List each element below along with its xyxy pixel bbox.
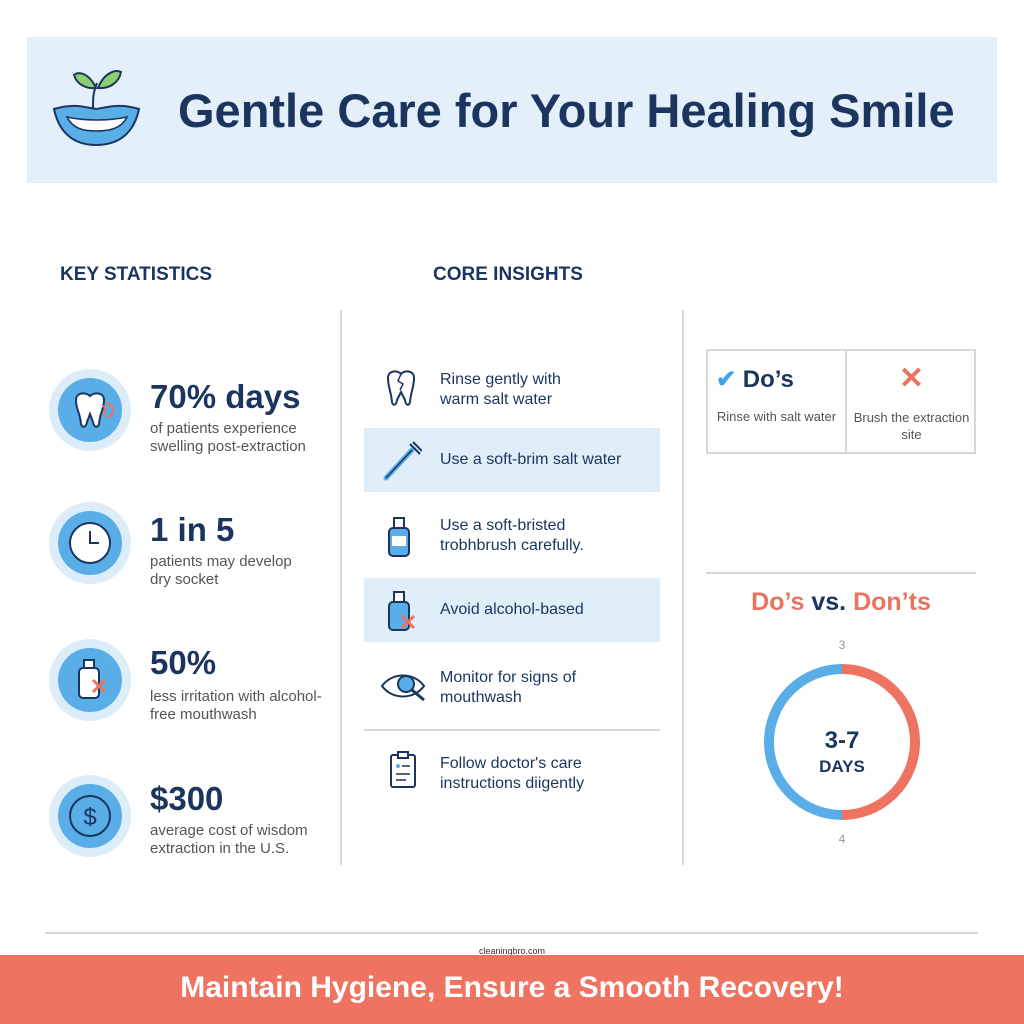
- stat: 1 in 5: 1 in 5: [150, 511, 234, 548]
- stat: $300: extraction in the U.S.: [150, 840, 289, 857]
- stat: 1 in 5: [49, 502, 292, 588]
- stat: $300: average cost of wisdom: [150, 822, 308, 839]
- insight 1: Rinse gently with: [440, 371, 561, 388]
- stat: 50%: [49, 639, 322, 723]
- insight 3: Use a soft-bristed: [440, 517, 565, 534]
- insight 6: Follow doctor's care: [440, 755, 582, 772]
- insight 2 highlighted: Use a soft-brim salt water: [440, 451, 621, 468]
- heading: key statistics: KEY STATISTICS: [60, 264, 212, 285]
- stat: $300: $: [83, 804, 97, 831]
- stat: 70%: of patients experience: [150, 420, 297, 437]
- do's cell: ✔ Do’s: [716, 366, 794, 393]
- footer banner: [0, 955, 1024, 1024]
- stat: 50%: less irritation with alcohol-: [150, 688, 322, 705]
- chart: recovery donut: 3-7: [825, 727, 859, 754]
- chart: recovery donut: [764, 638, 920, 846]
- stat: $300: $300: [150, 780, 223, 817]
- insight 1: warm salt water: [440, 391, 552, 408]
- stat: 50%: free mouthwash: [150, 706, 257, 723]
- don'ts cell: ✕: [899, 362, 924, 395]
- stat: 70%: [49, 369, 306, 455]
- insight 6: instructions diigently: [440, 775, 584, 792]
- insight 5: Monitor for signs of: [440, 669, 576, 686]
- insight 3: [388, 517, 584, 557]
- heading: do's vs don'ts: Do’s vs. Don’ts: [751, 588, 931, 616]
- don'ts cell: Brush the extraction: [854, 410, 969, 425]
- insight 1: [387, 370, 561, 408]
- insight 5: mouthwash: [440, 689, 522, 706]
- insight 5: [380, 669, 576, 706]
- don'ts cell: [854, 362, 969, 442]
- don'ts cell: site: [901, 427, 922, 442]
- insight 4 highlighted: [364, 578, 660, 642]
- insight 6: [390, 751, 584, 792]
- footer banner: Maintain Hygiene, Ensure a Smooth Recovery!: [180, 971, 844, 1004]
- source text: cleaningbro.com: [479, 946, 545, 956]
- chart: recovery donut: DAYS: [819, 757, 865, 776]
- insight 3: trobhbrush carefully.: [440, 537, 584, 554]
- icon: smile with sprout: [52, 70, 140, 146]
- stat: 70%: swelling post-extraction: [150, 438, 306, 455]
- stat: 70%: 70% days: [150, 378, 300, 415]
- stat: 1 in 5: dry socket: [150, 571, 218, 588]
- insight 2 highlighted: [364, 428, 660, 492]
- panel: key statistics: [49, 369, 322, 857]
- do's cell: [716, 366, 836, 424]
- panel: core insights: [364, 370, 660, 792]
- table: do's and don'ts: [706, 349, 976, 454]
- stat: $300: [49, 775, 308, 857]
- insight 4 highlighted: Avoid alcohol-based: [440, 601, 584, 618]
- header band: [27, 37, 997, 183]
- title: Gentle Care for Your Healing Smile: [178, 84, 955, 137]
- stat: 1 in 5: patients may develop: [150, 553, 292, 570]
- do's cell: Rinse with salt water: [717, 409, 836, 424]
- heading: core insights: CORE INSIGHTS: [433, 264, 583, 285]
- chart: recovery donut: 4: [839, 832, 845, 846]
- stat: 50%: 50%: [150, 644, 216, 681]
- chart: recovery donut: 3: [839, 638, 845, 652]
